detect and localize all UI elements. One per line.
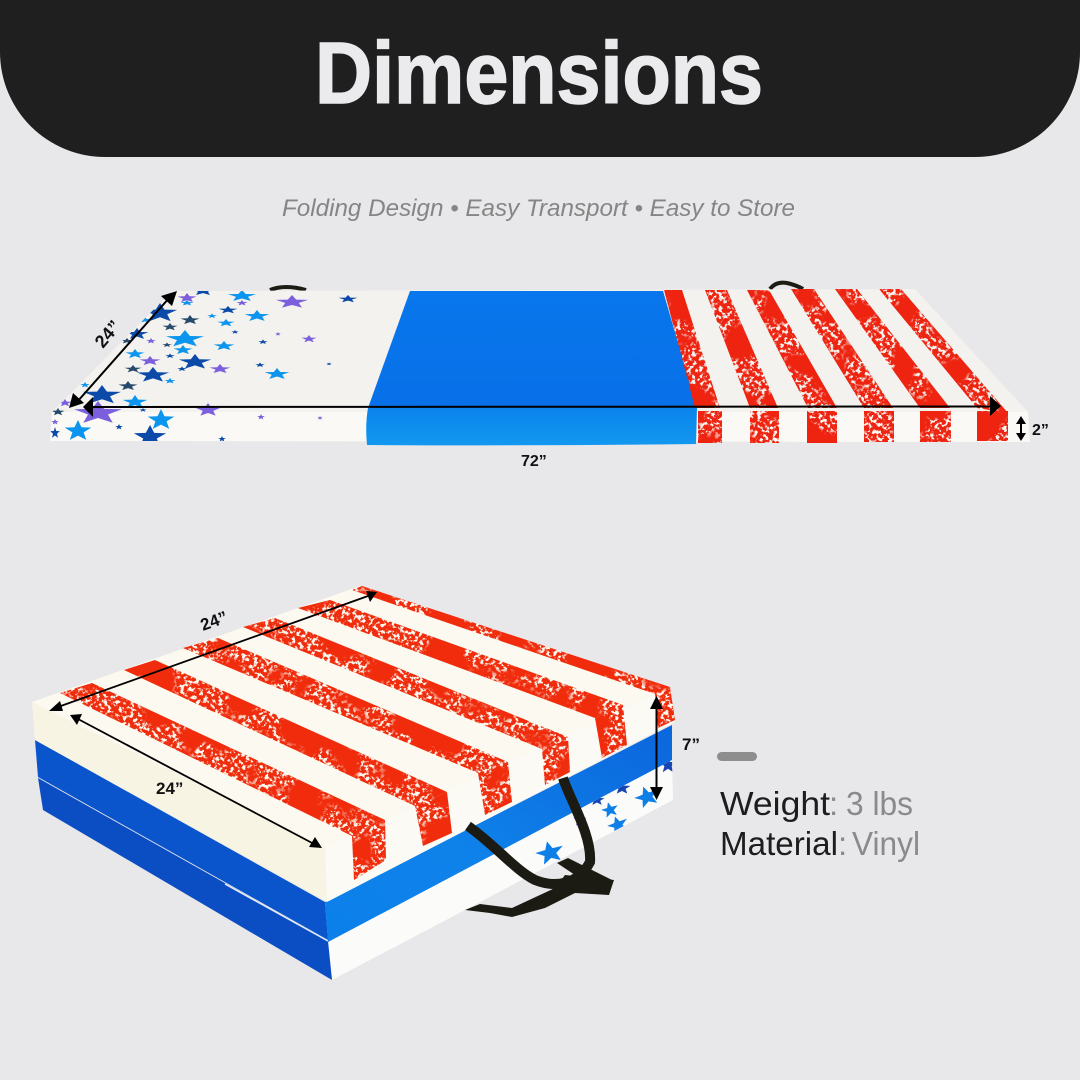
mat top face	[52, 289, 1028, 412]
label: 72 inch: 72”	[521, 453, 547, 470]
title: Dimensions	[315, 25, 763, 122]
label: 24 inch flat: 24”	[91, 316, 125, 352]
red distressed stripes folded	[60, 586, 675, 880]
specs: weight	[720, 785, 913, 822]
label: 24 inch side edge: 24”	[156, 779, 183, 798]
cream right face	[325, 687, 675, 902]
specs: material: Material	[720, 825, 838, 862]
specs: weight: 3 lbs	[846, 785, 913, 822]
specs: weight: Weight	[720, 785, 830, 822]
blue centre panel front	[366, 408, 697, 445]
dimension arrow: 72 inch length	[83, 396, 1001, 417]
cream top face	[32, 586, 670, 847]
specs: weight: :	[829, 785, 838, 822]
blue left face lower	[38, 778, 332, 980]
dimension arrow: 24 inch width flat	[69, 291, 177, 408]
label: 2 inch: 2”	[1032, 422, 1049, 439]
white seam	[225, 884, 328, 941]
lower layer white right side	[328, 760, 673, 980]
label: 7 inch: 7”	[682, 735, 700, 754]
star pattern panel	[50, 286, 358, 447]
light blue stars	[65, 290, 289, 440]
dimension arrow: 24 inch top edge	[49, 591, 377, 711]
spec dash	[717, 752, 757, 761]
dark blue stars	[50, 286, 358, 447]
icon: rear handles	[270, 283, 803, 290]
stars on lower layer	[533, 756, 677, 866]
purple stars	[51, 293, 323, 424]
navy stars	[51, 315, 200, 415]
specs: material	[720, 825, 920, 862]
red distressed stripes	[664, 289, 1008, 443]
specs: material: Vinyl	[852, 825, 920, 862]
dimension arrow: 24 inch side edge	[70, 714, 322, 848]
specs: material: :	[838, 825, 847, 862]
label: 24 inch top edge: 24”	[198, 608, 230, 635]
cream left face	[32, 702, 327, 902]
subtitle: Folding Design • Easy Transport • Easy to Store	[282, 195, 795, 222]
dimension arrow: 7 inch height	[650, 696, 663, 800]
icon: carry handle	[465, 778, 614, 917]
blue left face upper	[35, 740, 328, 940]
mat front face	[50, 412, 1030, 442]
header banner	[0, 0, 1080, 157]
blue centre panel top	[368, 291, 697, 408]
dimension arrow: 2 inch thickness	[1016, 416, 1026, 441]
blue right face	[325, 725, 672, 942]
flat unfolded mat	[50, 283, 1030, 447]
folded mat	[32, 586, 677, 980]
